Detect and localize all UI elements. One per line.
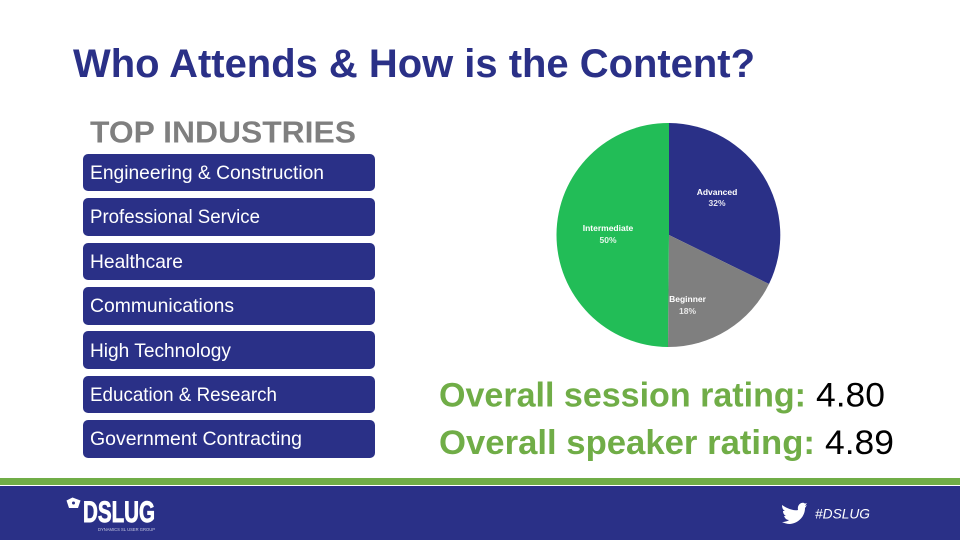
industry: communications: Communications xyxy=(90,295,234,317)
icon: twitter bird xyxy=(782,503,807,524)
panel: industries list xyxy=(83,154,375,458)
logo: DSLUG xyxy=(66,496,155,532)
industry: healthcare: Healthcare xyxy=(90,251,183,273)
label: advanced: Advanced xyxy=(697,187,737,197)
industry: professional service xyxy=(83,198,375,236)
label: intermediate xyxy=(583,223,634,245)
session rating: Overall session rating: xyxy=(439,376,806,414)
logo: DSLUG: DYNAMICS SL USER GROUP xyxy=(98,527,155,532)
industry: government xyxy=(83,420,375,458)
label: beginner: Beginner xyxy=(669,294,707,304)
logo: DSLUG: DSLUG xyxy=(83,496,155,529)
industry: engineering: Engineering & Construction xyxy=(90,162,324,184)
industry: high technology xyxy=(83,331,375,369)
hashtag: #DSLUG xyxy=(815,506,870,522)
label: beginner: 18% xyxy=(679,306,696,316)
footer xyxy=(0,478,960,540)
heading: top industries: TOP INDUSTRIES xyxy=(90,114,356,150)
label: advanced xyxy=(697,187,737,208)
label: beginner xyxy=(669,294,707,316)
industry: professional service: Professional Service xyxy=(90,206,260,228)
speaker rating: 4.89 xyxy=(825,424,894,462)
label: intermediate: Intermediate xyxy=(583,223,634,233)
industry: education xyxy=(83,376,375,413)
label: advanced: 32% xyxy=(708,198,726,208)
title: Who Attends & How is the Content? xyxy=(73,42,755,86)
industry: government: Government Contracting xyxy=(90,428,302,450)
ratings xyxy=(439,376,894,462)
session rating: 4.80 xyxy=(816,376,885,414)
industry: education: Education & Research xyxy=(90,384,277,406)
industry: high technology: High Technology xyxy=(90,340,231,362)
industry: engineering xyxy=(83,154,375,191)
speaker rating: Overall speaker rating: xyxy=(439,424,815,462)
industry: healthcare xyxy=(83,243,375,280)
label: intermediate: 50% xyxy=(599,235,617,245)
pie chart: experience level xyxy=(556,123,780,347)
industry: communications xyxy=(83,287,375,325)
